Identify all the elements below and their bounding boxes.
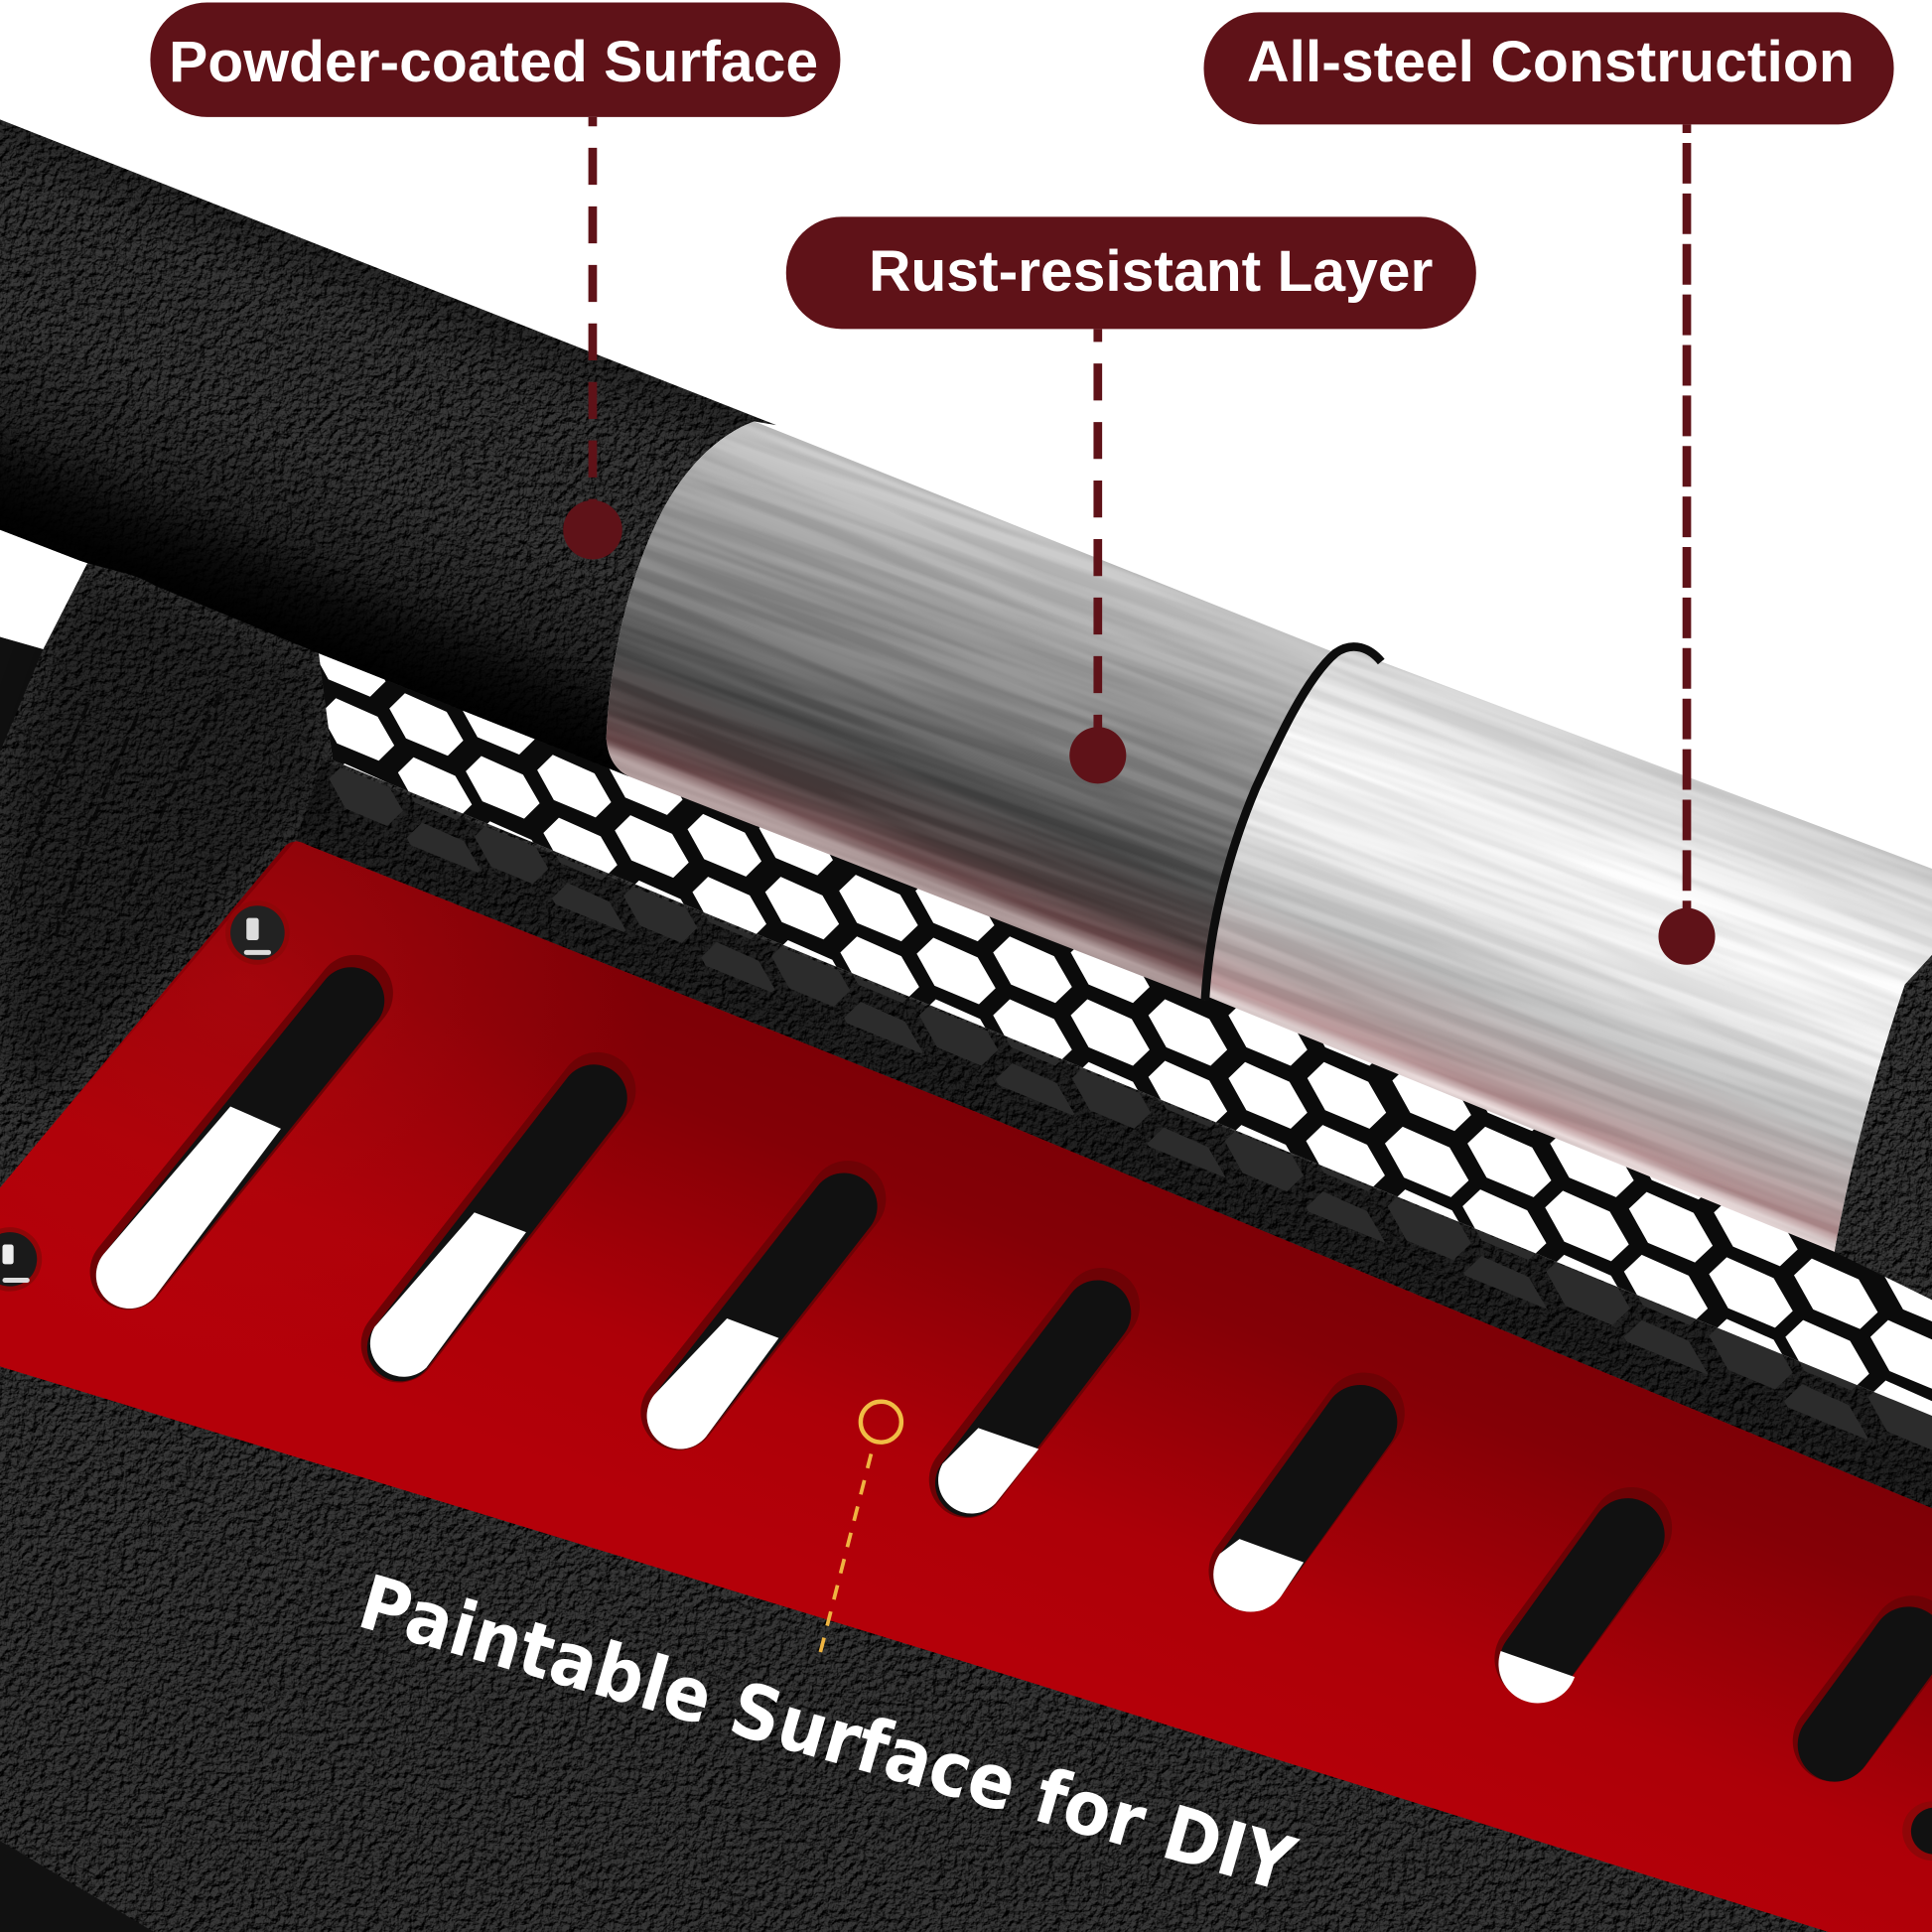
smooth shadow under gap <box>0 637 43 752</box>
lower black housing <box>0 563 1932 1932</box>
all-steel metal core <box>1209 651 1932 1252</box>
leader line <box>1094 329 1101 732</box>
bracket weld marks <box>12 692 221 936</box>
slot 1 <box>96 993 354 1309</box>
screw bottom right <box>1902 1801 1932 1861</box>
screw top left <box>225 900 290 965</box>
mesh shadow on housing <box>312 629 1932 1518</box>
red paintable plate <box>0 840 1932 1932</box>
marker dot <box>1069 727 1126 783</box>
plate highlight <box>0 840 966 1453</box>
slot 2 <box>370 1090 598 1377</box>
powder-coated black tube <box>0 119 776 776</box>
yellow dashed leader <box>818 1453 871 1661</box>
plate slots <box>96 993 1912 1744</box>
upper tube assembly <box>0 119 1932 1447</box>
textured black bar body <box>0 563 1932 1932</box>
coating seam <box>1205 646 1381 1001</box>
callout: All-steel Construction <box>1204 12 1894 965</box>
tube shading <box>0 119 776 776</box>
slot 3 <box>647 1199 848 1449</box>
callout: Rust-resistant Layer <box>786 216 1476 783</box>
plate surface <box>0 842 1932 1932</box>
hexagonal mesh panel <box>319 653 1932 1451</box>
slot 5 <box>1213 1414 1364 1612</box>
rust-resistant layer metal <box>606 421 1330 1001</box>
pill <box>150 2 840 117</box>
pill text: All-steel Construction <box>1247 30 1855 94</box>
marker dot <box>563 500 622 559</box>
marker dot <box>1658 908 1716 965</box>
slot 4 <box>938 1307 1102 1513</box>
mesh frame <box>308 640 1932 1430</box>
slot 7 <box>1834 1636 1912 1744</box>
yellow ring marker <box>861 1402 901 1443</box>
plate screws <box>0 900 1932 1861</box>
dark base shadow <box>0 1841 154 1932</box>
callout: Paintable Surface for DIY <box>349 1402 1305 1909</box>
pill <box>786 216 1476 329</box>
screw left edge <box>0 1227 42 1292</box>
band shadow beneath mesh <box>296 760 1932 1508</box>
leader line <box>589 117 596 507</box>
pill <box>1204 12 1894 124</box>
callout: Powder-coated Surface <box>150 2 840 559</box>
mesh openings <box>312 629 1932 1518</box>
right black tube end <box>1835 955 1932 1300</box>
leader line <box>1684 124 1691 914</box>
pill text: Powder-coated Surface <box>169 30 818 94</box>
slot 6 <box>1498 1528 1631 1703</box>
angled label: Paintable Surface for DIY <box>349 1559 1305 1909</box>
mounting bracket shading <box>0 579 323 1109</box>
pill text: Rust-resistant Layer <box>869 239 1433 304</box>
